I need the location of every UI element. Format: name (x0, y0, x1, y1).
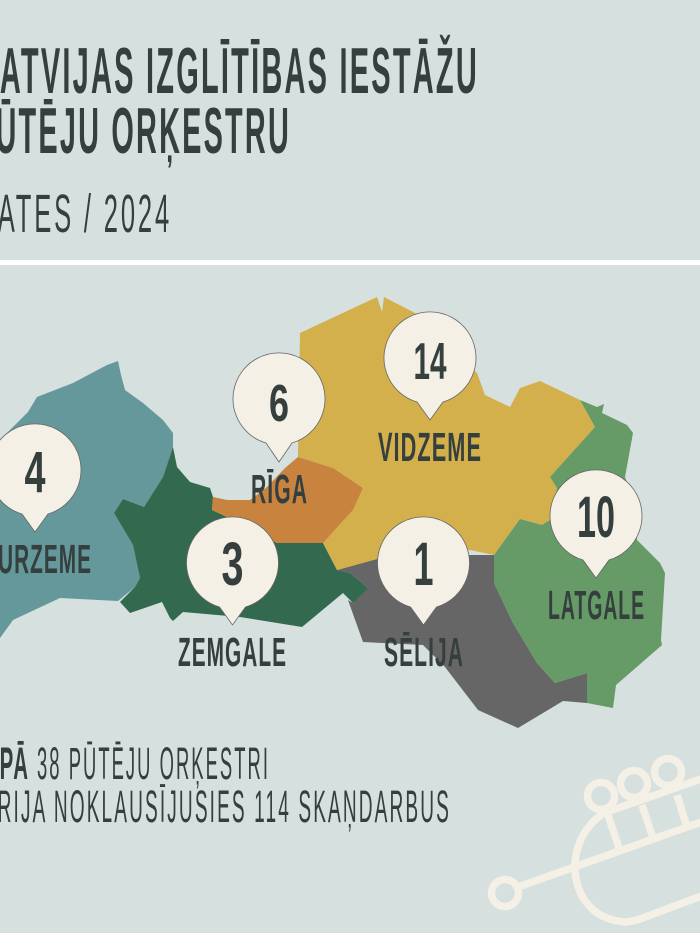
pin: Zemgale 3 (186, 517, 279, 625)
pin: Rīga 6 (233, 353, 325, 462)
label: Vidzeme: VIDZEME (378, 424, 482, 470)
region: Latgale (494, 400, 665, 708)
label: Sēlija: SĒLIJA (384, 629, 464, 675)
heading: title (0, 34, 479, 168)
map of Latvia regions (0, 297, 665, 728)
pin: Vidzeme 14 (384, 312, 476, 420)
label: Zemgale: ZEMGALE (178, 629, 287, 675)
pin: Vidzeme 14: 14 (414, 333, 447, 391)
summary text (0, 738, 451, 832)
pin: Sēlija 1 (378, 517, 470, 625)
pin: Latgale 10: 10 (577, 485, 615, 550)
label: Rīga: RĪGA (251, 466, 308, 512)
pin: Latgale 10 (550, 470, 642, 578)
region: Sēlija (337, 555, 587, 728)
region: Vidzeme (298, 297, 595, 570)
pin: Zemgale 3: 3 (222, 530, 244, 598)
pin: Kurzeme 4 (0, 424, 81, 532)
summary text: 38 PŪTĒJU ORĶESTRI (37, 738, 270, 789)
pin: Sēlija 1: 1 (414, 530, 434, 598)
pin: Rīga 6: 6 (269, 375, 289, 433)
pin: Kurzeme 4: 4 (24, 440, 46, 505)
region: Rīga (212, 457, 363, 543)
region: Kurzeme (0, 361, 173, 638)
region: Zemgale (114, 447, 368, 627)
icon: trumpet (492, 758, 700, 922)
